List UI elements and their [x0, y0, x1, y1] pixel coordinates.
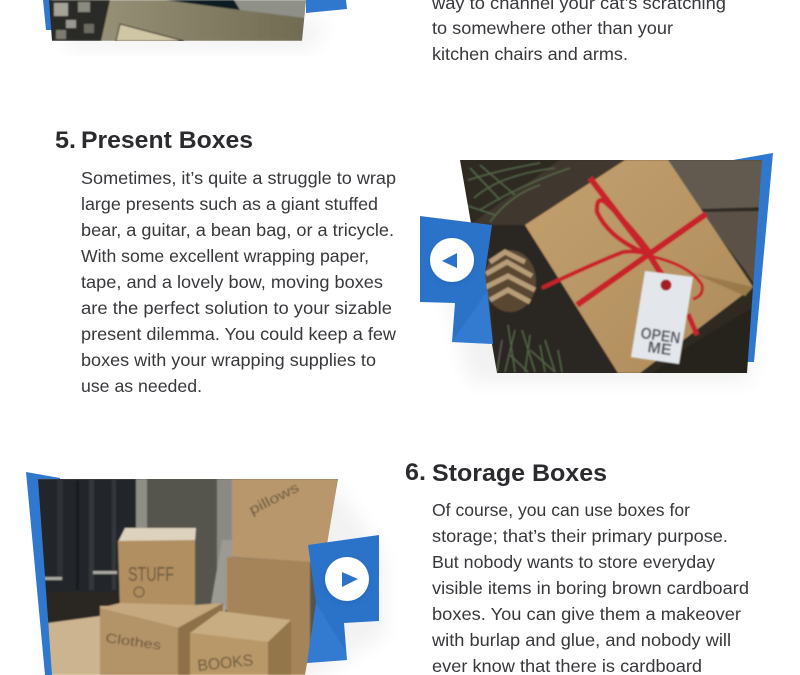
- text block: storage boxes description: [431, 500, 749, 675]
- text block: present boxes description: tape, and a lovely bow, moving boxes: [81, 272, 383, 292]
- door: [35, 479, 138, 624]
- text block: present boxes description: are the perfect solution to your sizable: [81, 298, 392, 318]
- text block: storage boxes description: But nobody wants to store everyday: [432, 552, 715, 572]
- text block: storage boxes description: visible items in boring brown cardboard: [432, 578, 749, 598]
- text block: storage boxes description: Of course, you can use boxes for: [432, 500, 690, 520]
- text block: present boxes description: bear, a guitar, a bean bag, or a tricycle.: [81, 220, 394, 240]
- text block: present boxes description: present dilemma. You could keep a few: [81, 324, 396, 344]
- blue flag with back arrow: [420, 216, 493, 344]
- red ribbon: [542, 178, 706, 335]
- clothes box: [100, 603, 223, 675]
- text block: present boxes description: boxes with your wrapping supplies to: [81, 350, 376, 370]
- heading: 5. Present Boxes: Present Boxes: [81, 127, 253, 154]
- photo: labelled moving boxes: [35, 475, 345, 675]
- text block: present boxes description: use as needed.: [81, 376, 202, 396]
- gift tag: [631, 271, 693, 364]
- pillows box: pillows: [246, 479, 301, 518]
- text block: scratching box description: [431, 0, 726, 64]
- blue accent left: [26, 472, 60, 675]
- panel: present box photo: [420, 153, 773, 382]
- blue accent right: [306, 0, 347, 13]
- blue flag with play arrow: [307, 535, 379, 663]
- photo: cardboard scratcher: [45, 0, 310, 41]
- panel: storage boxes photo: [26, 472, 385, 675]
- books box: BOOKS: [197, 652, 254, 675]
- text block: storage boxes description: with burlap and glue, and nobody will: [431, 630, 731, 650]
- text block: scratching box description: to somewhere other than your: [432, 18, 673, 38]
- cardboard gift box: [525, 160, 753, 373]
- gift tag: OPEN: [639, 325, 681, 348]
- text block: present boxes description: large presents such as a giant stuffed: [81, 194, 378, 214]
- photo: wrapped gift box: [455, 155, 765, 375]
- heading: 6. Storage Boxes: Storage Boxes: [432, 460, 607, 487]
- panel: scratching box photo (section 4 remainder): [43, 0, 347, 50]
- pillows box: [232, 479, 338, 562]
- gift tag: ME: [646, 339, 673, 359]
- text block: present boxes description: With some excellent wrapping paper,: [81, 246, 369, 266]
- stuff box: [118, 528, 196, 612]
- pine cone: [484, 250, 536, 312]
- heading: 6. Storage Boxes: 6.: [405, 459, 426, 486]
- heading: 5. Present Boxes: 5.: [55, 127, 76, 154]
- clothes box: Clothes: [105, 630, 163, 653]
- lower stacked box: [227, 557, 310, 675]
- text block: present boxes description: [81, 168, 396, 396]
- blue accent left: [43, 0, 52, 30]
- text block: storage boxes description: boxes. You can give them a makeover: [432, 604, 741, 624]
- text block: storage boxes description: storage; that’s their primary purpose.: [432, 526, 728, 546]
- stuff box: STUFF: [128, 564, 174, 586]
- blue accent right: [733, 153, 773, 362]
- text block: scratching box description: kitchen chairs and arms.: [432, 44, 628, 64]
- text block: present boxes description: Sometimes, it’s quite a struggle to wrap: [81, 168, 396, 188]
- books box: [190, 611, 291, 675]
